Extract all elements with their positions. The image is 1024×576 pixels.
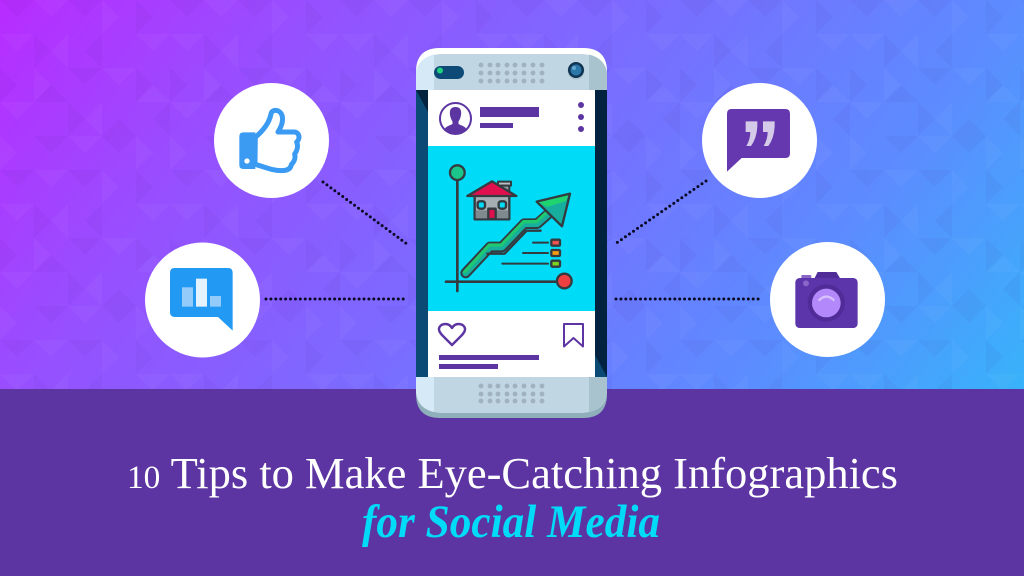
phone (416, 48, 607, 418)
legend swatches (551, 240, 560, 267)
icon: quote speech bubble in white circle (702, 83, 817, 198)
dotted connector: like icon to phone (323, 182, 407, 244)
top bezel (416, 48, 607, 90)
legend lines (502, 243, 548, 264)
icon: thumbs up in white circle (214, 83, 329, 198)
bottom bezel (416, 377, 607, 413)
profile avatar (440, 103, 471, 134)
dotted connector: chart icon to phone (266, 298, 406, 300)
rising arrow (465, 194, 570, 273)
icon: bookmark outline (564, 324, 583, 346)
front camera (568, 62, 584, 80)
top speaker grille (479, 63, 544, 83)
profile name bars (480, 107, 539, 128)
phone body (416, 48, 607, 418)
title line 1: 10 Tips to Make Eye-Catching Infographics (127, 449, 898, 498)
dotted connector: quote icon to phone (615, 181, 706, 244)
status light pill (434, 66, 464, 79)
dotted connector: camera icon to phone (616, 298, 762, 300)
gradient background with triangle pattern (0, 0, 1024, 390)
axis end markers (450, 165, 572, 288)
chart icon: house value rising (446, 165, 572, 291)
bottom title band (0, 389, 1024, 576)
side screen edges (416, 90, 607, 377)
title line 2: for Social Media (362, 496, 660, 548)
white post screen (428, 90, 595, 377)
axes (446, 178, 558, 291)
icon: camera in white circle (770, 242, 885, 357)
house (467, 181, 516, 219)
icon: bar chart speech bubble in white circle (145, 242, 260, 358)
cyan post image (428, 146, 595, 311)
icon: heart outline (439, 324, 465, 345)
bottom speaker grille (479, 384, 544, 403)
menu dots (578, 102, 584, 132)
caption bars (439, 355, 539, 369)
